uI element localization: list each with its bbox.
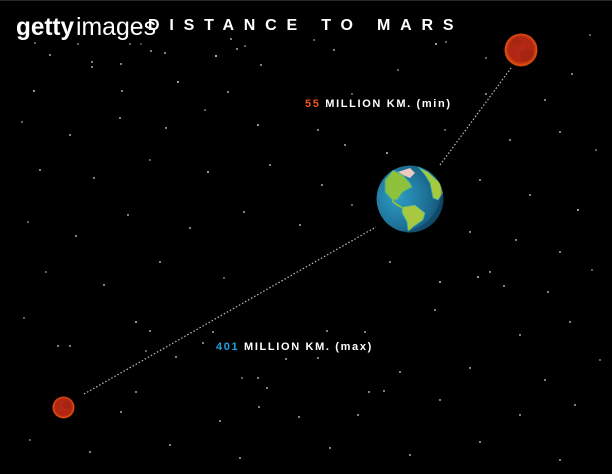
North America: [385, 170, 412, 200]
icon: Earth: [376, 166, 444, 232]
South America: [402, 205, 425, 232]
icon: Mars far: [52, 396, 74, 418]
Shadow: [402, 186, 444, 232]
Central America: [392, 200, 402, 208]
dotted line: Earth to near Mars: [440, 68, 511, 165]
top edge line: [0, 0, 612, 1]
watermark logo: images: [76, 13, 156, 41]
watermark logo: [16, 13, 156, 41]
label: minimum distance: 55 MILLION KM. (min): [305, 98, 452, 110]
Africa and Europe: [418, 167, 443, 200]
dotted line: Earth to far Mars: [84, 227, 376, 394]
icon: Mars near: [504, 34, 538, 66]
watermark logo: getty: [16, 13, 74, 41]
Greenland: [398, 168, 415, 178]
title: DISTANCE TO MARS: [148, 17, 463, 34]
label: maximum distance: 401 MILLION KM. (max): [216, 341, 373, 353]
